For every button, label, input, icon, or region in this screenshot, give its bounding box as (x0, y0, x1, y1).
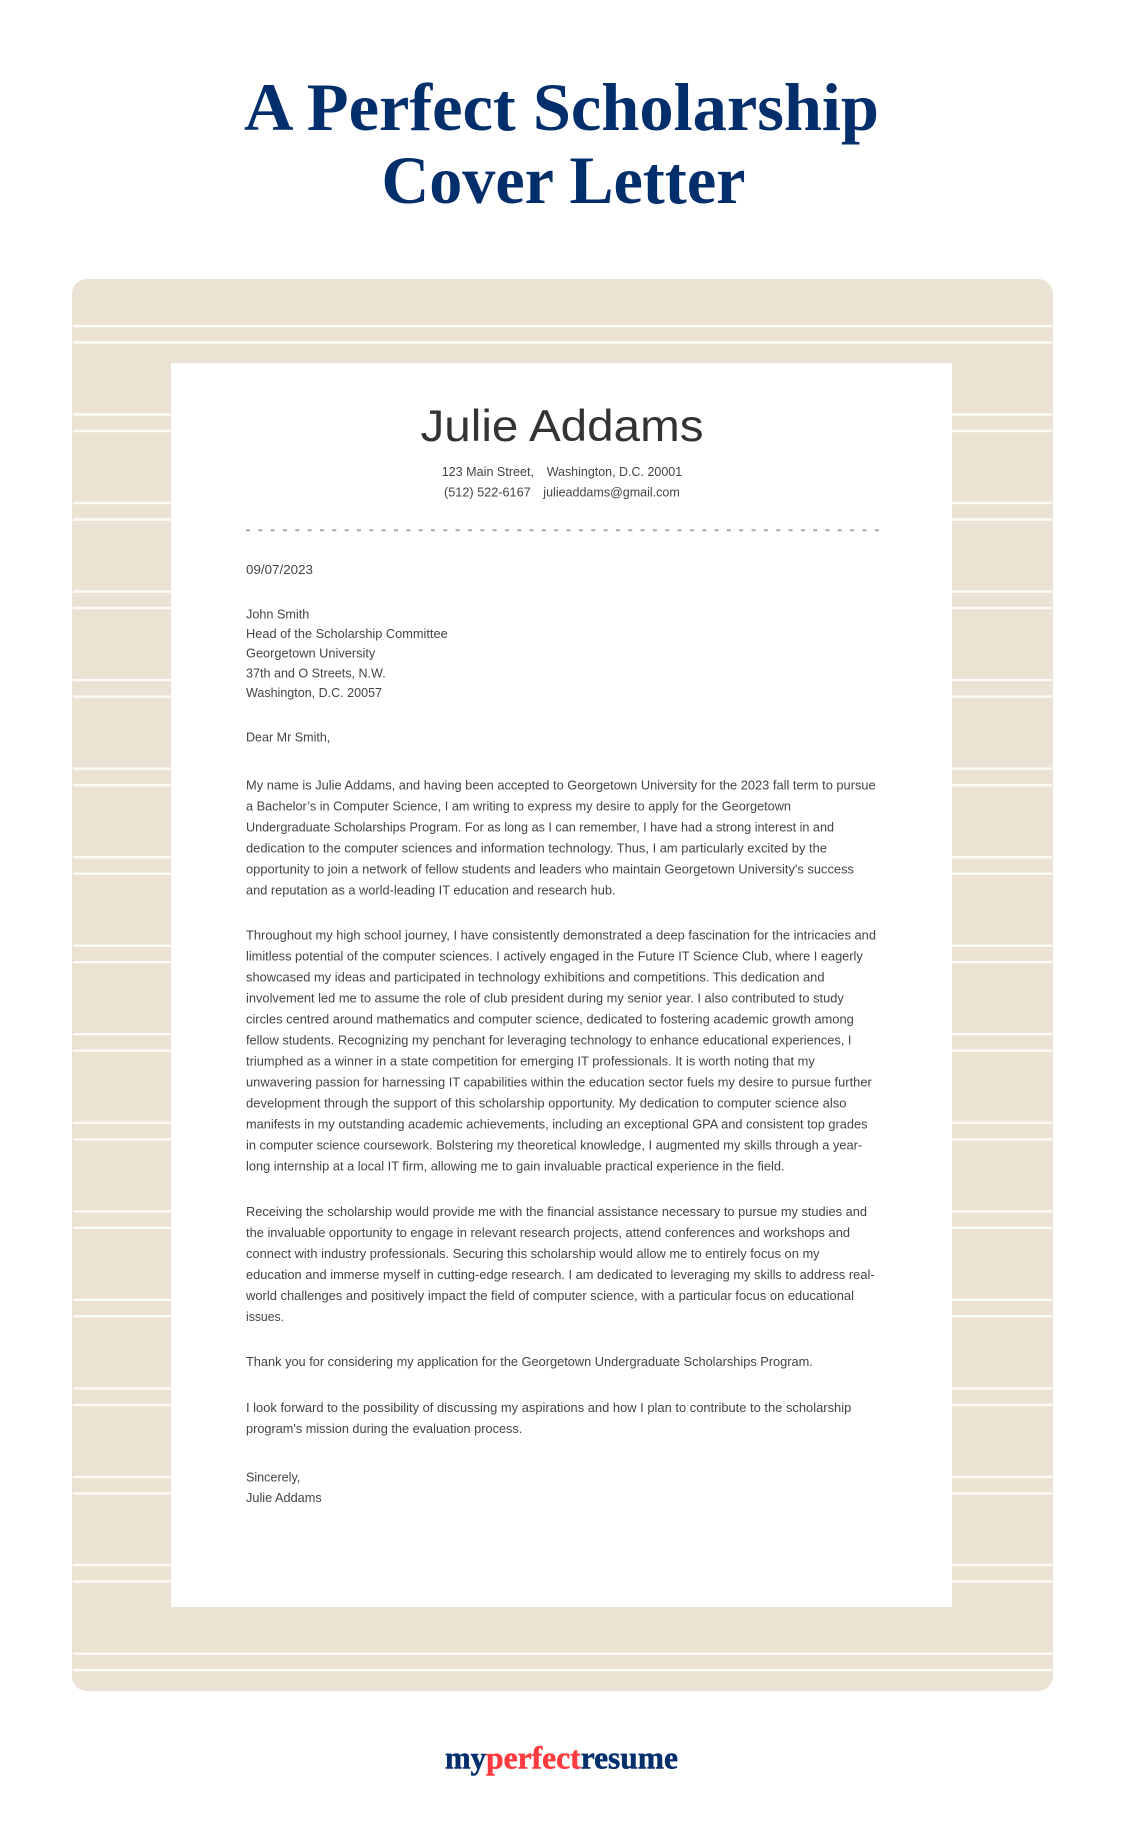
sender contact details: Washington, D.C. 20001 (547, 464, 682, 479)
paragraph 2: involvement led me to assume the role of club president during my senior year. I also contributed to study (246, 990, 844, 1006)
paragraph 2 (246, 928, 876, 1174)
recipient address block: 37th and O Streets, N.W. (246, 665, 386, 680)
paragraph 2: fellow students. Recognizing my penchant for leveraging technology to enhance educational experiences, I (246, 1032, 852, 1048)
paragraph 5: I look forward to the possibility of discussing my aspirations and how I plan to contribute to the scholarship (246, 1400, 851, 1415)
recipient address block: Georgetown University (246, 646, 376, 661)
paragraph 4: Thank you for considering my application for the Georgetown Undergraduate Scholarships Program. (246, 1354, 813, 1369)
logo: myperfectresume: my (445, 1740, 486, 1776)
paragraph 1: a Bachelor’s in Computer Science, I am writing to express my desire to apply for the Georgetown (246, 798, 791, 814)
sender contact details: julieaddams@gmail.com (542, 484, 680, 500)
paragraph 1: opportunity to join a network of fellow students and leaders who maintain Georgetown University's success (246, 862, 854, 876)
paragraph 3: connect with industry professionals. Securing this scholarship would allow me to entirely focus on my (246, 1246, 820, 1261)
paragraph 2: limitless potential of the computer sciences. I actively engaged in the Future IT Science Club, where I eagerly (246, 948, 863, 964)
sender contact details: 123 Main Street, (442, 464, 534, 479)
date: 09/07/2023 (246, 562, 313, 577)
paragraph 2: in computer science coursework. Bolstering my theoretical knowledge, I augmented my skills through a year- (246, 1138, 862, 1152)
paragraph 3: the invaluable opportunity to engage in relevant research projects, attend conferences and workshops and (246, 1225, 850, 1240)
sign-off: Sincerely, (246, 1470, 300, 1484)
paragraph 1: and reputation as a world-leading IT education and research hub. (246, 882, 616, 898)
recipient address block: Head of the Scholarship Committee (246, 626, 448, 641)
logo: myperfectresume (445, 1740, 678, 1776)
paragraph 5: program's mission during the evaluation process. (246, 1421, 522, 1436)
paragraph 3: world challenges and positively impact the field of computer science, with a particular focus on educational (245, 1288, 854, 1303)
sign-off: Julie Addams (246, 1490, 322, 1505)
paragraph 2: manifests in my outstanding academic achievements, including an exceptional GPA and consistent top grades (246, 1116, 868, 1132)
sender contact details (442, 464, 682, 500)
paragraph 2: development through the support of this scholarship opportunity. My dedication to computer science also (246, 1096, 846, 1110)
paragraph 1 (246, 778, 876, 898)
title (244, 69, 879, 218)
salutation: Dear Mr Smith, (246, 730, 330, 745)
panel: beige striped background (72, 279, 1053, 1691)
recipient address block: Washington, D.C. 20057 (246, 685, 382, 700)
sender contact details: (512) 522-6167 (444, 484, 531, 500)
logo: myperfectresume: perfect (486, 1740, 581, 1776)
title: A Perfect Scholarship (244, 69, 879, 145)
panel: letter paper (171, 363, 952, 1607)
paragraph 1: dedication to the computer sciences and information technology. Thus, I am particularly excited by the (246, 840, 827, 856)
letter heading: sender name: Julie Addams (420, 402, 704, 451)
title: Cover Letter (382, 142, 746, 218)
paragraph 2: Throughout my high school journey, I have consistently demonstrated a deep fascination for the intricacies and (246, 928, 876, 942)
paragraph 3 (245, 1204, 875, 1324)
sign-off (246, 1470, 322, 1505)
logo: myperfectresume: resume (581, 1740, 678, 1776)
recipient address block (246, 606, 448, 700)
paragraph 2: triumphed as a winner in a state competition for emerging IT professionals. It is worth noting that my (246, 1054, 815, 1068)
paragraph 5 (246, 1400, 851, 1436)
recipient address block: John Smith (246, 606, 309, 622)
paragraph 3: issues. (246, 1309, 284, 1324)
paragraph 2: unwavering passion for harnessing IT capabilities within the education sector fuels my desire to pursue further (246, 1074, 872, 1090)
paragraph 3: Receiving the scholarship would provide me with the financial assistance necessary to pursue my studies and (246, 1204, 867, 1219)
paragraph 3: education and immerse myself in cutting-edge research. I am dedicated to leveraging my skills to address real- (246, 1267, 875, 1282)
paragraph 2: circles centred around mathematics and computer science, dedicated to fostering academic growth among (246, 1012, 854, 1026)
paragraph 1: Undergraduate Scholarships Program. For as long as I can remember, I have had a strong interest in and (246, 820, 834, 834)
paragraph 2: showcased my ideas and participated in technology exhibitions and competitions. This dedication and (246, 970, 824, 984)
paragraph 1: My name is Julie Addams, and having been accepted to Georgetown University for the 2023 fall term to pursue (246, 778, 876, 792)
paragraph 2: long internship at a local IT firm, allowing me to gain invaluable practical experience in the field. (246, 1158, 784, 1174)
